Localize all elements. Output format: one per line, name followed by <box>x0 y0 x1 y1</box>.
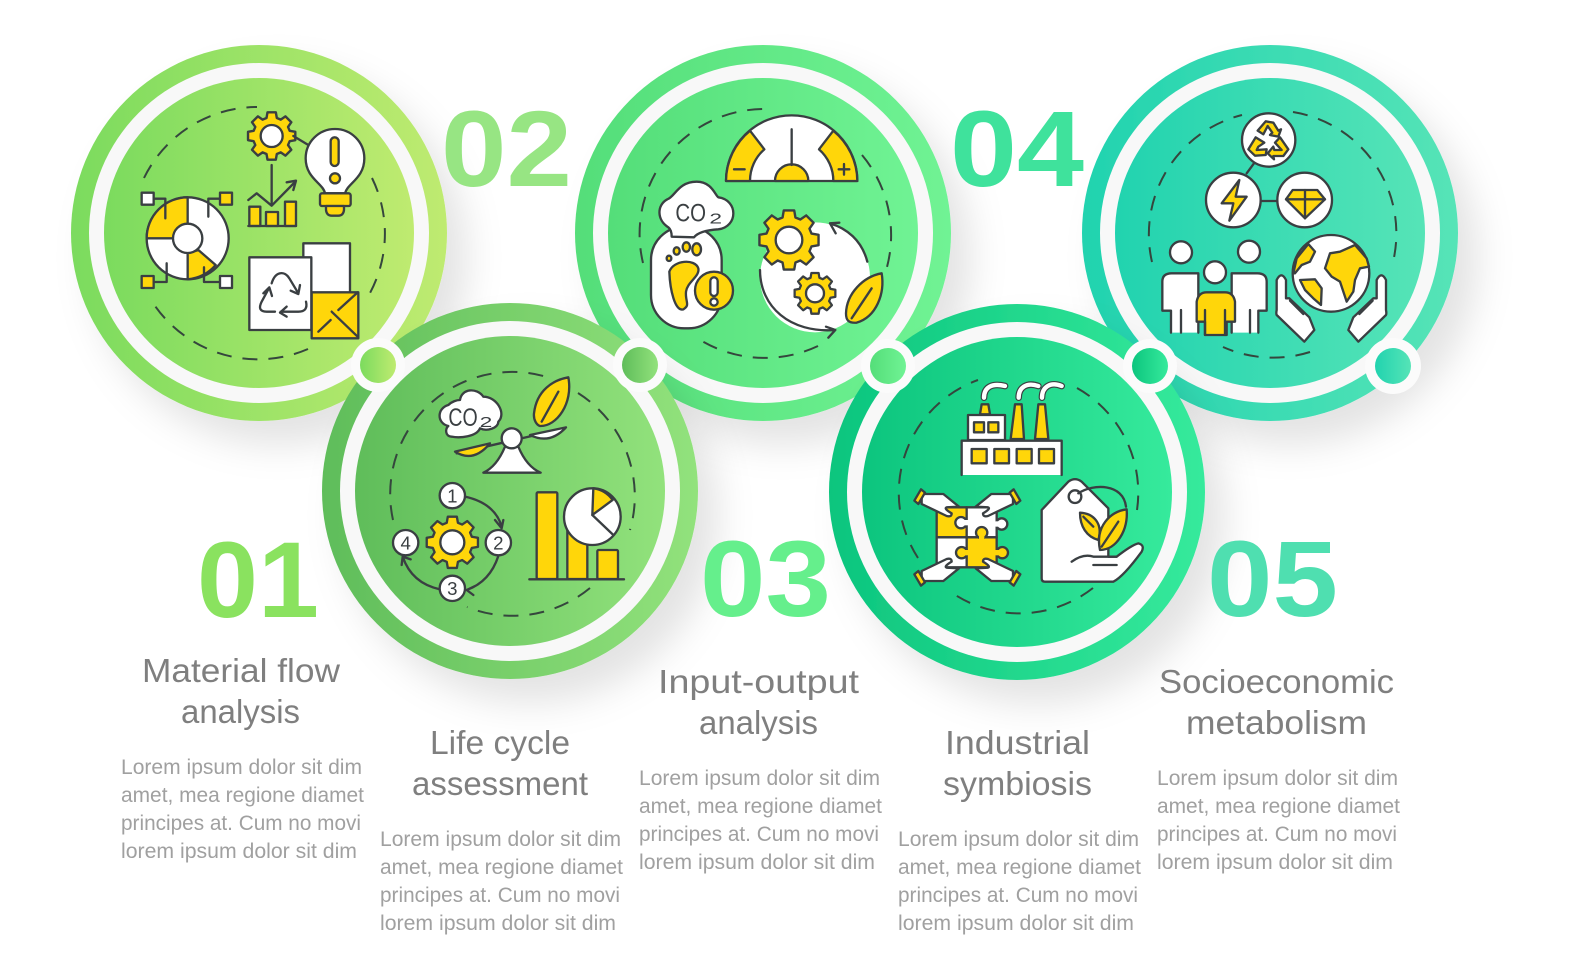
heading <box>943 724 1092 802</box>
body: principes at. Cum no movi <box>121 812 361 835</box>
icon: numbered process cycle <box>393 483 511 601</box>
icon: input-output analysis <box>651 115 882 338</box>
icon: donut chart with handles <box>142 193 232 288</box>
connector nodes <box>351 338 1421 394</box>
heading <box>658 663 859 741</box>
heading <box>1159 663 1394 741</box>
heading <box>412 724 588 802</box>
icon: recycled paper and box <box>249 243 358 338</box>
body: Lorem ipsum dolor sit dim <box>121 756 362 779</box>
heading: Input-output <box>658 663 859 700</box>
body: principes at. Cum no movi <box>380 884 620 907</box>
text block: life cycle assessment <box>380 724 623 935</box>
icon: carbon footprint <box>651 182 733 328</box>
icon: industrial symbiosis <box>914 384 1143 586</box>
body: amet, mea regione diamet <box>1157 795 1400 818</box>
number 04: 04 <box>950 88 1084 209</box>
icon: life cycle assessment <box>393 377 624 601</box>
heading: symbiosis <box>943 765 1092 802</box>
icon: gear cycle with leaf <box>759 210 882 338</box>
text block: material flow analysis <box>121 652 364 863</box>
panel: material flow analysis circle <box>71 45 447 421</box>
body: principes at. Cum no movi <box>1157 823 1397 846</box>
number 02: 02 <box>441 88 572 209</box>
panel: input-output analysis circle <box>575 45 951 421</box>
body: Lorem ipsum dolor sit dim <box>898 828 1139 851</box>
icon: carbon footprint: CO <box>675 201 706 228</box>
text block: input-output analysis <box>639 663 882 874</box>
text block: socioeconomic metabolism <box>1157 663 1400 874</box>
icon: factory <box>962 384 1062 475</box>
heading <box>142 652 340 730</box>
icon: carbon footprint: 2 <box>709 212 722 228</box>
icon: light bulb <box>293 129 364 216</box>
icon: gauge <box>726 115 857 181</box>
heading: Material flow <box>142 652 340 689</box>
node 5 <box>1365 338 1421 394</box>
body <box>121 756 364 863</box>
body <box>380 828 623 935</box>
icon: eco tag in hand <box>1042 479 1143 582</box>
number 05: 05 <box>1207 518 1338 639</box>
body: amet, mea regione diamet <box>380 856 623 879</box>
icon: resource network <box>1206 113 1332 227</box>
body: amet, mea regione diamet <box>121 784 364 807</box>
icon: numbered process cycle: 2 <box>493 532 504 553</box>
icon: bars and pie chart <box>529 488 624 579</box>
panel: industrial symbiosis circle <box>829 304 1205 680</box>
icon: puzzle and four hands <box>914 489 1020 586</box>
icon: numbered process cycle: 4 <box>400 532 411 553</box>
heading: Socioeconomic <box>1159 663 1394 700</box>
heading: analysis <box>699 704 818 741</box>
body: lorem ipsum dolor sit dim <box>121 840 357 863</box>
body: amet, mea regione diamet <box>898 856 1141 879</box>
body <box>1157 767 1400 874</box>
body: amet, mea regione diamet <box>639 795 882 818</box>
body: Lorem ipsum dolor sit dim <box>380 828 621 851</box>
icon: globe in hands <box>1276 235 1386 342</box>
body: Lorem ipsum dolor sit dim <box>639 767 880 790</box>
node 3 <box>861 339 915 393</box>
heading: assessment <box>412 765 588 802</box>
icon: material flow analysis <box>142 112 364 338</box>
body <box>639 767 882 874</box>
body: Lorem ipsum dolor sit dim <box>1157 767 1398 790</box>
node 4 <box>1123 339 1177 393</box>
body: lorem ipsum dolor sit dim <box>1157 851 1393 874</box>
heading: Industrial <box>945 724 1090 761</box>
node 2 <box>613 338 667 392</box>
body <box>898 828 1141 935</box>
icon: rising bar chart <box>248 165 296 226</box>
node 1 <box>351 338 405 392</box>
panel: socioeconomic metabolism circle <box>1082 45 1458 421</box>
icon: numbered process cycle: 3 <box>447 578 458 599</box>
body: lorem ipsum dolor sit dim <box>898 912 1134 935</box>
body: lorem ipsum dolor sit dim <box>639 851 875 874</box>
heading: metabolism <box>1186 704 1367 741</box>
icon: gear <box>248 112 295 160</box>
number 03: 03 <box>700 518 831 639</box>
icon: socioeconomic metabolism <box>1162 113 1386 342</box>
icon: CO2 and leaf balance <box>440 377 569 473</box>
icon: CO2 and leaf balance: 2 <box>480 415 492 431</box>
panel: life cycle assessment circle <box>322 303 698 679</box>
icon: numbered process cycle: 1 <box>447 485 458 506</box>
icon: CO2 and leaf balance: CO <box>448 405 478 432</box>
heading: analysis <box>181 693 300 730</box>
body: principes at. Cum no movi <box>898 884 1138 907</box>
icon: people <box>1162 241 1267 335</box>
body: lorem ipsum dolor sit dim <box>380 912 616 935</box>
heading: Life cycle <box>430 724 570 761</box>
number 01: 01 <box>197 519 319 640</box>
body: principes at. Cum no movi <box>639 823 879 846</box>
text block: industrial symbiosis <box>898 724 1141 935</box>
